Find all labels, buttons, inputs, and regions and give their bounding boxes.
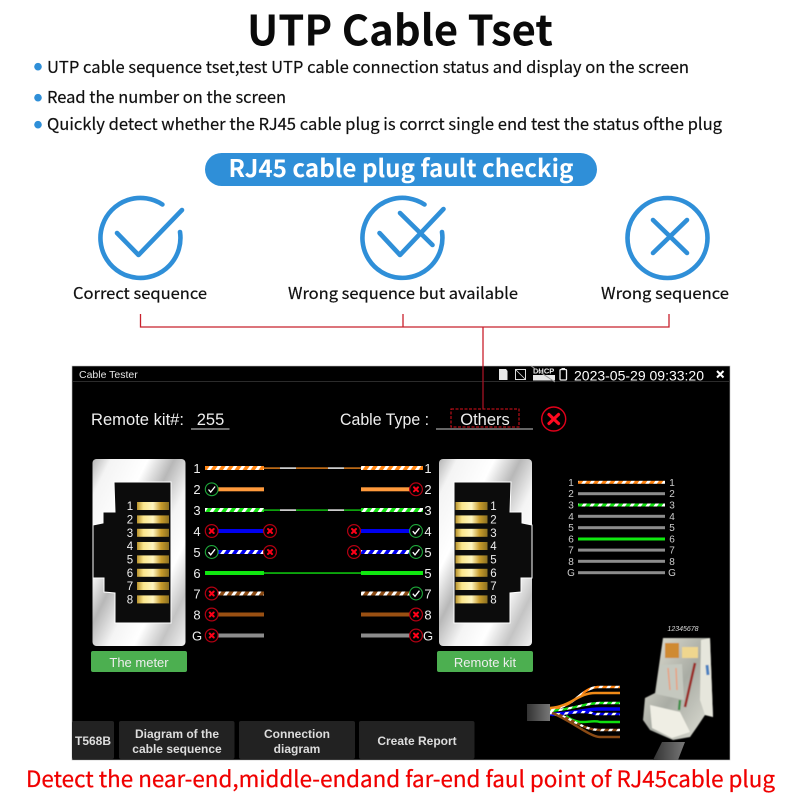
connector: remote kit: [439, 459, 532, 646]
button: diagram of the cable sequence: cable sequence: [132, 742, 222, 756]
sequence summary wires: 4: [568, 512, 574, 523]
wire row 5: [205, 546, 422, 558]
wire row 8: [205, 608, 422, 621]
sequence summary wires: 6: [669, 534, 675, 546]
wire row numbers: 5: [193, 545, 201, 560]
sequence summary wires: 3: [568, 500, 574, 512]
wire row numbers: 5: [424, 545, 432, 560]
panel: cable tester screen: [72, 366, 730, 760]
sequence summary wires: 8: [568, 557, 574, 568]
button: diagram of the cable sequence: [119, 721, 234, 759]
icon: stripped cable fan: [527, 687, 620, 737]
wire row numbers: [192, 461, 433, 644]
wire row numbers: 2: [424, 482, 432, 497]
remote kit number: 255: [197, 411, 224, 429]
bullet 3: Quickly detect whether the RJ45 cable plug is corrct single end test the status ofthe plug: [47, 111, 723, 135]
icon: cable type fail: [542, 407, 566, 431]
sequence summary wires: 7: [669, 546, 675, 557]
heading pill: RJ45 cable plug fault checkig: RJ45 cable plug fault checkig: [228, 150, 574, 185]
wire row numbers: 1: [193, 461, 201, 476]
sequence summary wires: 1: [669, 478, 675, 489]
wire row numbers: 7: [193, 586, 201, 602]
button: connection diagram: Connection: [264, 727, 330, 741]
connector: remote kit: 2: [490, 514, 497, 526]
icon: RJ45 plug: [643, 638, 713, 760]
sequence summary wires: 4: [669, 512, 675, 523]
wire row 7: [205, 587, 422, 600]
sequence summary wires: 7: [568, 546, 574, 557]
connector: remote kit: 6: [490, 568, 497, 580]
connector: the meter: 7: [127, 581, 133, 593]
button: the meter: The meter: [109, 655, 169, 670]
status bar icons: [499, 366, 566, 382]
wire row numbers: 6: [193, 566, 201, 581]
icon: wrong sequence cross: [628, 198, 708, 278]
button: diagram of the cable sequence: Diagram of the: [135, 727, 219, 741]
connector: remote kit: 7: [490, 581, 497, 593]
wire row 3: [205, 508, 423, 512]
sequence summary wires: 8: [669, 557, 675, 568]
connector: remote kit: 4: [490, 541, 497, 553]
icon: wrong sequence but available: [362, 198, 444, 278]
sequence summary wires: 2: [669, 489, 675, 500]
wire row numbers: 8: [424, 608, 432, 622]
connector: the meter: 3: [127, 528, 133, 540]
feature bullet list: [34, 54, 723, 135]
sequence summary wires: 5: [669, 523, 675, 534]
label: wrong sequence but available: Wrong sequence but available: [288, 280, 518, 304]
connector: the meter: 6: [127, 568, 133, 580]
icon: correct sequence check: [100, 198, 182, 278]
sequence summary wires: G: [567, 568, 575, 579]
wire row numbers: 2: [193, 482, 201, 497]
sequence summary wires: G: [668, 568, 676, 579]
wiring diagram: [192, 461, 433, 644]
button: remote kit: [437, 651, 533, 672]
button: create report: [359, 721, 474, 759]
wire row numbers: 3: [193, 503, 201, 518]
wire row 6: [205, 571, 423, 575]
wire row 4: [205, 525, 422, 537]
sequence summary wires: 5: [568, 523, 574, 534]
label: correct sequence: Correct sequence: [73, 280, 207, 304]
wire row 1: [205, 466, 423, 470]
sequence summary wires: 3: [669, 500, 675, 512]
wire row numbers: G: [192, 628, 202, 644]
wire row numbers: 4: [424, 524, 432, 539]
screen title: Cable Tester: [79, 369, 138, 381]
wire row numbers: 5: [424, 566, 432, 581]
button: T568B: [72, 721, 114, 759]
connector: the meter: 8: [127, 594, 133, 606]
cable type: Cable Type :: [340, 411, 429, 429]
wire row G: [205, 629, 422, 642]
highlight box on cable type: [451, 409, 519, 427]
close icon: [717, 371, 724, 378]
wire row numbers: 3: [424, 503, 432, 518]
red bracket connector: [140, 314, 669, 409]
remote kit number: [91, 411, 230, 429]
cable type: Others: [460, 411, 510, 429]
wire row numbers: 1: [424, 461, 432, 476]
label: wrong sequence: Wrong sequence: [601, 280, 729, 304]
sequence summary wires: 1: [568, 478, 574, 489]
status bar icons: DHCP: [533, 366, 554, 376]
button: create report: Create Report: [377, 734, 457, 748]
connector: remote kit: 5: [490, 554, 497, 566]
sequence summary wires: 6: [568, 534, 574, 546]
wire row 2: [205, 483, 422, 496]
connector: the meter: [92, 459, 186, 646]
connector: the meter: 4: [127, 541, 134, 553]
connector: remote kit: 3: [490, 528, 497, 540]
remote kit number: Remote kit#:: [91, 411, 184, 429]
connector: remote kit: 1: [490, 501, 497, 513]
sequence summary wires: 2: [568, 489, 574, 500]
bottom caption: Detect the near-end,middle-endand far-end faul point of RJ45cable plug: [26, 762, 775, 794]
wire row numbers: G: [423, 628, 433, 644]
connector: the meter: 5: [127, 554, 133, 566]
wire row numbers: 8: [193, 608, 201, 622]
bullet 1: UTP cable sequence tset,test UTP cable connection status and display on the screen: [47, 54, 689, 78]
button: T568B: T568B: [75, 734, 111, 748]
connector: the meter: 1: [127, 501, 133, 513]
date and time: 2023-05-29 09:33:20: [574, 368, 704, 384]
plug pin numbers: 12345678: [667, 626, 699, 633]
sequence summary wires: [567, 478, 676, 579]
connector: remote kit: 8: [490, 594, 497, 606]
button: remote kit: Remote kit: [454, 655, 516, 670]
wire row numbers: 4: [193, 524, 201, 539]
cable type: [340, 411, 533, 429]
button: the meter: [91, 651, 187, 672]
wire row numbers: 7: [424, 586, 432, 602]
button: connection diagram: [239, 721, 355, 759]
connector: the meter: 2: [127, 514, 133, 526]
button: connection diagram: diagram: [274, 742, 320, 756]
bullet 2: Read the number on the screen: [47, 84, 286, 108]
